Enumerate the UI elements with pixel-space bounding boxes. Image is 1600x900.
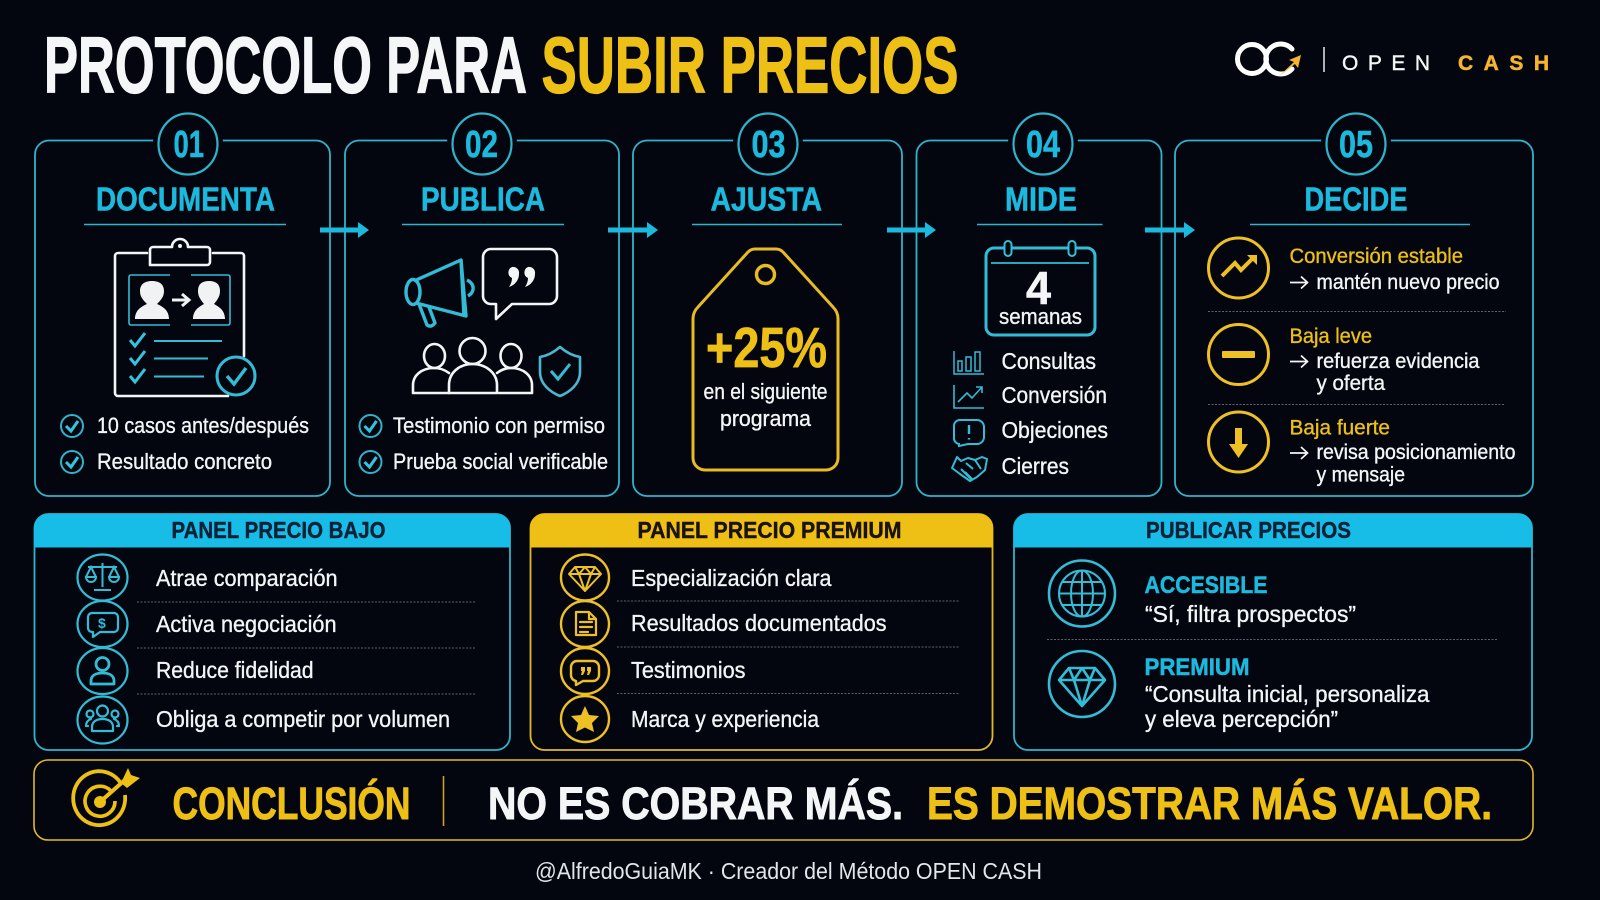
icon: price tag bbox=[693, 249, 838, 470]
panel header bbox=[1014, 514, 1532, 548]
conclusion message bbox=[488, 778, 1492, 829]
footer: @AlfredoGuiaMK · Creador del Método OPEN CASH bbox=[535, 858, 1042, 884]
list item: Testimonio con permiso bbox=[393, 413, 605, 438]
panel header: PUBLICAR PRECIOS bbox=[1146, 517, 1351, 543]
card frame bbox=[345, 140, 619, 496]
number badge bbox=[1008, 109, 1078, 179]
decision: baja leve: Baja leve bbox=[1290, 325, 1372, 348]
metric: conversion: Conversión bbox=[1002, 382, 1107, 408]
metric: consultas bbox=[954, 348, 1096, 374]
logo: open cash: CASH bbox=[1458, 52, 1549, 75]
panel: conclusion bbox=[34, 760, 1533, 840]
row: atrae comparacion bbox=[78, 554, 338, 600]
number badge: 01 bbox=[174, 124, 204, 166]
text: premium bbox=[1144, 654, 1430, 732]
card frame bbox=[633, 140, 902, 496]
number badge: 03 bbox=[752, 124, 786, 166]
text: premium: “Consulta inicial, personaliza bbox=[1145, 681, 1430, 707]
panel frame bbox=[530, 514, 992, 750]
panel header: PANEL PRECIO BAJO bbox=[172, 517, 386, 543]
big number: +25% bbox=[706, 316, 827, 380]
icon: shield bbox=[540, 347, 580, 396]
arrow: step 1 to 2 bbox=[320, 222, 369, 238]
panel: step 01 documenta bbox=[35, 109, 330, 496]
text: accesible: “Sí, filtra prospectos” bbox=[1145, 601, 1356, 627]
decision: baja fuerte: revisa posicionamiento bbox=[1316, 440, 1516, 464]
panel: step 02 publica bbox=[345, 109, 619, 496]
heading: PUBLICA bbox=[421, 180, 545, 218]
text: accesible bbox=[1144, 572, 1356, 627]
panel header bbox=[530, 514, 993, 548]
panel: precio bajo bbox=[34, 514, 510, 750]
icon: minus bbox=[1208, 324, 1268, 384]
tag caption: en el siguiente bbox=[704, 379, 828, 404]
title: SUBIR PRECIOS bbox=[542, 20, 958, 110]
heading: DECIDE bbox=[1304, 180, 1408, 218]
icon: people bbox=[413, 338, 532, 393]
icon: OC mark bbox=[1238, 44, 1301, 77]
row: activa negociacion: $ bbox=[98, 615, 106, 631]
metric: objeciones: Objeciones bbox=[1002, 417, 1108, 443]
row: testimonios: Testimonios bbox=[631, 657, 746, 683]
icon: globe bbox=[1049, 560, 1115, 626]
decision: baja leve: y oferta bbox=[1316, 371, 1385, 395]
icon: diamond bbox=[1049, 651, 1115, 717]
panel: step 05 decide bbox=[1175, 109, 1533, 496]
number badge bbox=[733, 109, 803, 179]
row: activa negociacion bbox=[78, 601, 336, 647]
number badge bbox=[447, 109, 517, 179]
row: obliga a competir: Obliga a competir por volumen bbox=[156, 706, 450, 732]
conclusion message: ES DEMOSTRAR MÁS VALOR. bbox=[927, 778, 1492, 829]
heading: DOCUMENTA bbox=[96, 180, 275, 218]
metric: cierres bbox=[952, 453, 1069, 481]
icon: arrow down bbox=[1208, 412, 1268, 472]
text: accesible: ACCESIBLE bbox=[1144, 572, 1268, 599]
row: reduce fidelidad bbox=[78, 648, 314, 694]
icon: speech bubble with quote bbox=[483, 249, 557, 319]
row: marca y experiencia: Marca y experiencia bbox=[631, 706, 819, 732]
row: testimonios bbox=[561, 648, 746, 694]
conclusion label: CONCLUSIÓN bbox=[172, 778, 410, 829]
decision: conversion estable: Conversión estable bbox=[1290, 245, 1463, 268]
tag caption: programa bbox=[720, 406, 812, 431]
tag caption bbox=[704, 379, 828, 431]
panel: step 04 mide bbox=[916, 109, 1162, 496]
number badge: 04 bbox=[1026, 124, 1060, 166]
heading: MIDE bbox=[1005, 180, 1077, 218]
metric: conversion bbox=[954, 382, 1107, 408]
panel frame bbox=[1014, 514, 1532, 750]
decision: conversion estable bbox=[1290, 245, 1500, 294]
metric: cierres: Cierres bbox=[1002, 453, 1069, 479]
row: especializacion: Especialización clara bbox=[631, 565, 832, 591]
card frame bbox=[1175, 140, 1533, 496]
metric: objeciones bbox=[954, 417, 1108, 446]
card frame bbox=[35, 140, 330, 496]
row: resultados documentados: Resultados documentados bbox=[631, 610, 886, 636]
title: PROTOCOLO PARA bbox=[44, 20, 527, 110]
arrow: step 3 to 4 bbox=[887, 222, 936, 238]
icon: calendar bbox=[986, 241, 1095, 335]
text: premium: PREMIUM bbox=[1144, 654, 1250, 681]
banner frame bbox=[34, 760, 1533, 840]
logo: open cash: OPEN bbox=[1342, 52, 1430, 75]
panel: precio premium bbox=[530, 514, 993, 750]
row: atrae comparacion: Atrae comparación bbox=[156, 565, 338, 591]
decision: conversion estable: mantén nuevo precio bbox=[1316, 270, 1500, 294]
row: obliga a competir bbox=[78, 696, 450, 744]
heading: AJUSTA bbox=[710, 180, 822, 218]
panel: step 03 ajusta bbox=[633, 109, 902, 496]
panel frame bbox=[34, 514, 510, 750]
conclusion message: NO ES COBRAR MÁS. bbox=[488, 778, 903, 829]
panel header bbox=[34, 514, 510, 548]
text: premium: y eleva percepción” bbox=[1145, 706, 1338, 732]
icon: calendar: 4 bbox=[1026, 262, 1051, 314]
icon: target bbox=[73, 768, 140, 825]
number badge bbox=[1321, 109, 1391, 179]
metric: consultas: Consultas bbox=[1002, 348, 1096, 374]
decision: baja leve: refuerza evidencia bbox=[1316, 349, 1480, 373]
icon: megaphone bbox=[406, 260, 473, 326]
panel header: PANEL PRECIO PREMIUM bbox=[638, 517, 902, 543]
decision: baja fuerte: Baja fuerte bbox=[1290, 416, 1390, 440]
row: marca y experiencia bbox=[561, 696, 819, 742]
row: especializacion bbox=[561, 554, 832, 600]
icon: clipboard before and after bbox=[115, 239, 255, 396]
logo: open cash bbox=[1238, 44, 1549, 77]
icon: calendar: semanas bbox=[999, 304, 1082, 329]
decision: baja fuerte: y mensaje bbox=[1316, 462, 1405, 486]
arrow: step 4 to 5 bbox=[1145, 222, 1195, 238]
row: activa negociacion: Activa negociación bbox=[156, 611, 336, 637]
number badge: 05 bbox=[1339, 124, 1373, 166]
icon: trend up bbox=[1208, 238, 1268, 298]
number badge: 02 bbox=[465, 124, 498, 166]
list item: Resultado concreto bbox=[97, 449, 272, 474]
arrow: step 2 to 3 bbox=[608, 222, 658, 238]
row: reduce fidelidad: Reduce fidelidad bbox=[156, 657, 314, 683]
number badge bbox=[153, 109, 223, 179]
card frame bbox=[916, 140, 1162, 496]
list item: 10 casos antes/después bbox=[97, 413, 309, 438]
list item: Prueba social verificable bbox=[393, 449, 608, 474]
decision: baja fuerte bbox=[1290, 416, 1516, 486]
panel: publicar precios bbox=[1014, 514, 1532, 750]
row: resultados documentados bbox=[561, 601, 886, 647]
decision: baja leve bbox=[1290, 325, 1480, 395]
